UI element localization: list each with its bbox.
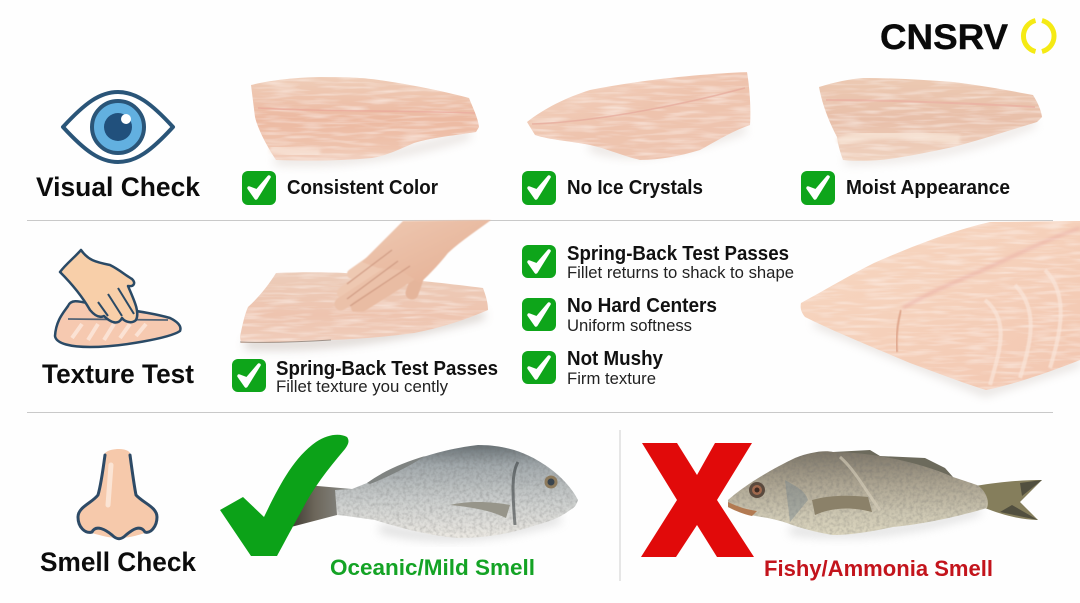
- check item: spring-back test, right: Spring-Back Test Passes: [567, 243, 789, 265]
- photo: fillet with hand: [240, 220, 491, 345]
- hand over fillet: [341, 220, 491, 307]
- check item: no ice crystals: [522, 171, 703, 205]
- check item: no hard centers: [522, 295, 717, 335]
- check item: moist appearance: Moist Appearance: [846, 177, 1010, 199]
- heading: visual check: Visual Check: [36, 172, 201, 202]
- panel: visual check: [36, 72, 1042, 205]
- check item: not mushy: Not Mushy: [567, 348, 664, 370]
- icon: hand pressing fillet: [55, 250, 181, 347]
- logo: CNSRV: CNSRV: [880, 18, 1009, 57]
- photo: large fillet close-up: [801, 221, 1080, 392]
- check item: not mushy: Firm texture: [567, 369, 656, 388]
- photo: fillet three: [819, 78, 1042, 161]
- check item: not mushy: [522, 348, 664, 388]
- big red X mark: [641, 443, 754, 557]
- icon: eye: [63, 92, 173, 162]
- check item: no hard centers: No Hard Centers: [567, 295, 717, 317]
- check item: no ice crystals: No Ice Crystals: [567, 177, 703, 199]
- check item: spring-back test, left: Fillet texture you cently: [276, 377, 448, 396]
- check item: spring-back test, left: [232, 358, 498, 396]
- icon: nose: [78, 449, 157, 539]
- panel: texture test: [42, 220, 1080, 396]
- check item: consistent color: [242, 171, 438, 205]
- check item: spring-back test, right: [522, 243, 794, 282]
- check item: no hard centers: Uniform softness: [567, 316, 692, 335]
- check item: spring-back test, right: Fillet returns to shack to shape: [567, 263, 794, 282]
- heading: texture test: Texture Test: [42, 359, 194, 389]
- photo: fresh fish: [291, 445, 578, 538]
- label: oceanic smell: Oceanic/Mild Smell: [330, 555, 535, 580]
- check item: moist appearance: [801, 171, 1010, 205]
- check item: spring-back test, left: Spring-Back Test Passes: [276, 358, 498, 380]
- big green check mark: [220, 435, 348, 556]
- photo: fillet one: [251, 77, 479, 161]
- panel: smell check: [40, 430, 1042, 581]
- label: fishy smell: Fishy/Ammonia Smell: [764, 556, 993, 581]
- heading: smell check: Smell Check: [40, 547, 197, 577]
- photo: fillet two: [527, 72, 750, 160]
- check item: consistent color: Consistent Color: [287, 177, 438, 199]
- photo: spoiled fish: [728, 450, 1042, 535]
